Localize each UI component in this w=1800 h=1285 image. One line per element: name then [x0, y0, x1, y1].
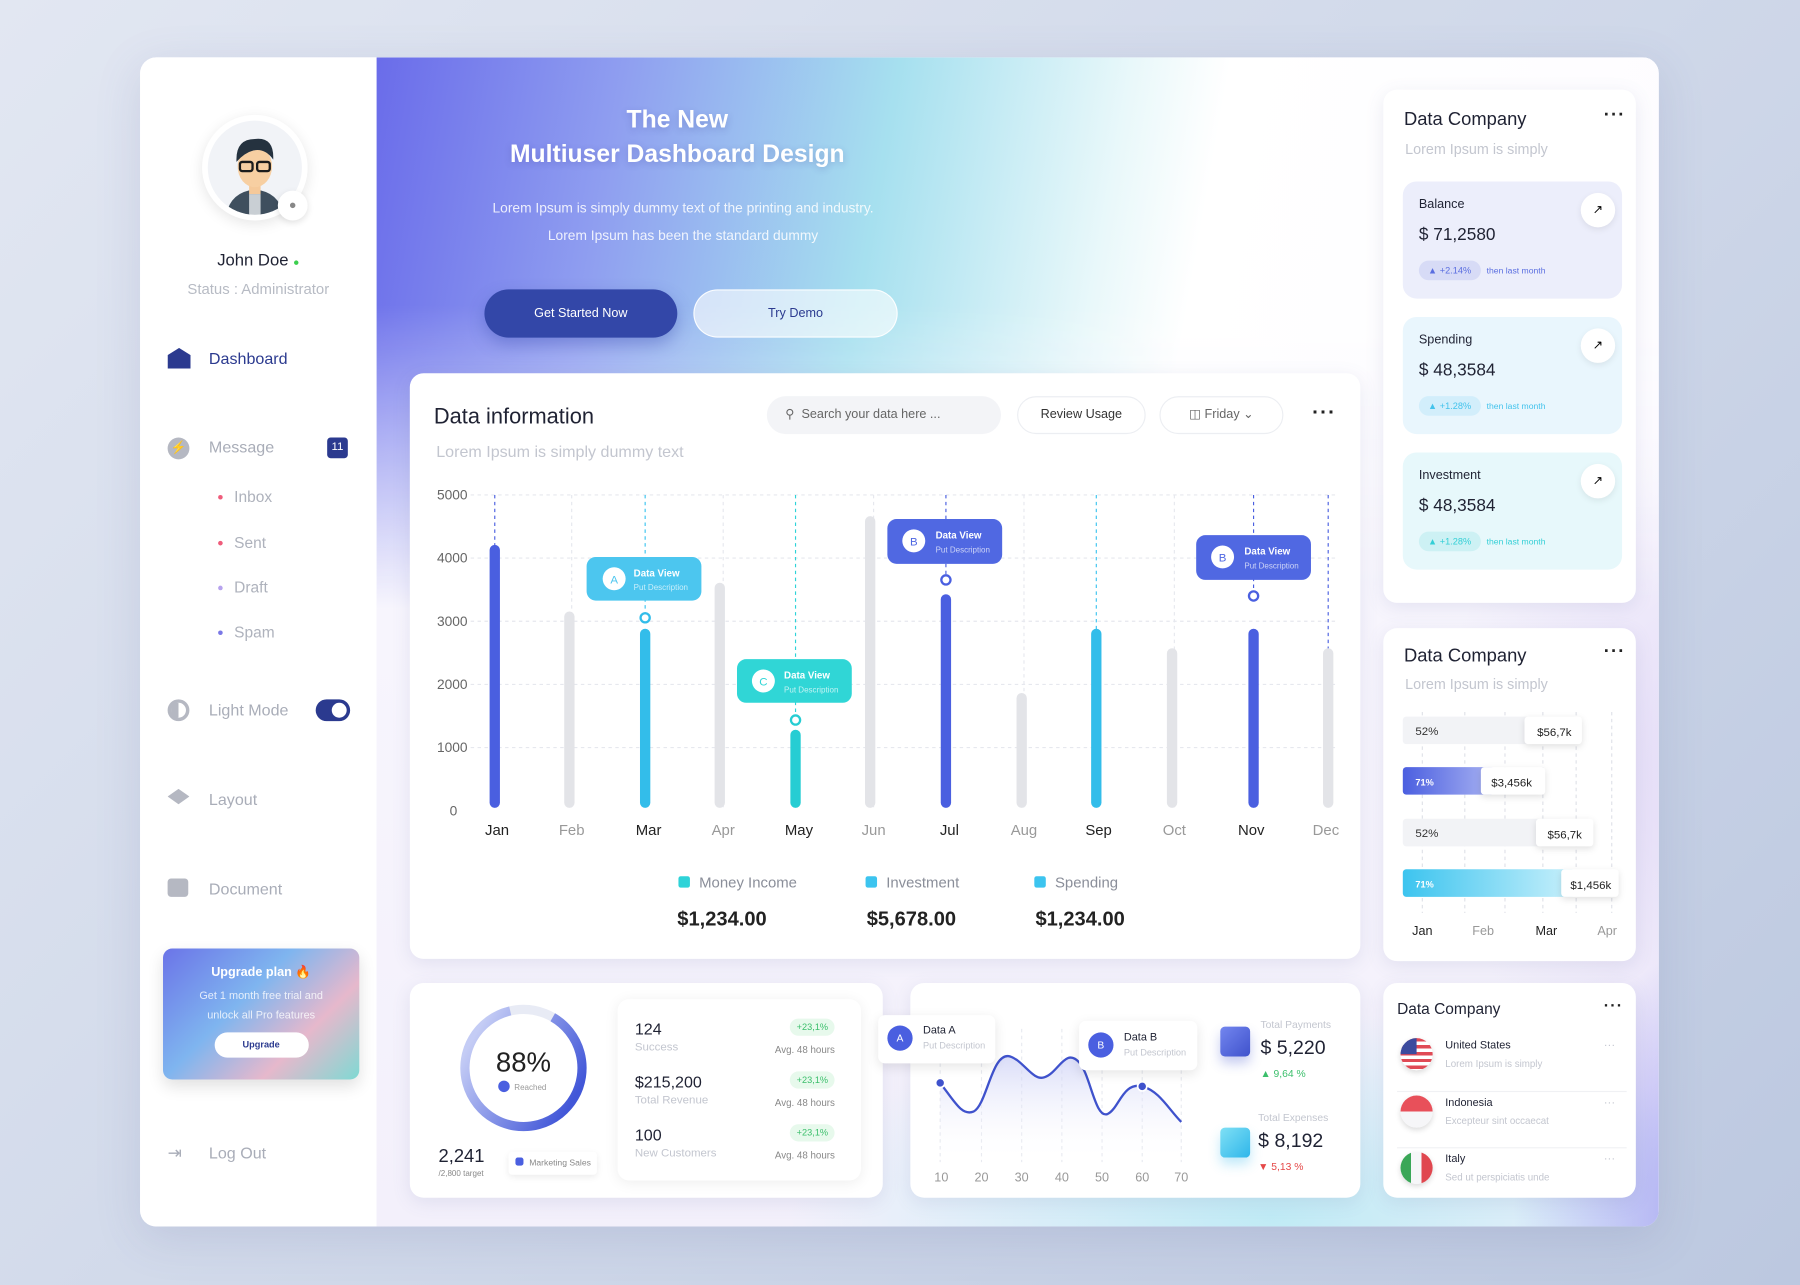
horizontal bar chart: [1402, 712, 1620, 938]
investment card: ▲ +1.28%: [1428, 536, 1471, 547]
balance card: Balance: [1419, 198, 1465, 211]
submenu: Spam: [234, 624, 275, 641]
panel: line chart & totals: Total Expenses: [1258, 1112, 1328, 1123]
line chart: 40: [1055, 1171, 1069, 1185]
stats list: +23,1%: [797, 1022, 828, 1032]
tooltip A: Data View: [634, 568, 680, 579]
country: italy: [1397, 1147, 1627, 1193]
panel: line chart & totals: $ 5,220: [1260, 1037, 1326, 1059]
bar chart: Apr: [712, 822, 735, 839]
total expenses: [1220, 1128, 1250, 1158]
investment card: $ 48,3584: [1419, 496, 1495, 516]
country: united states: United States: [1445, 1039, 1511, 1052]
nav: document: [168, 878, 282, 898]
bar chart: Feb: [559, 822, 585, 839]
tooltip B (Jul): B: [910, 536, 918, 548]
bar chart: 0: [450, 803, 458, 818]
nav: light mode: [168, 699, 350, 722]
horizontal bar chart: 52%: [1415, 726, 1438, 738]
donut chart: 88%: [496, 1046, 551, 1077]
hero title: [510, 106, 846, 170]
hero subtitle: [493, 200, 874, 243]
target count: 2,241: [439, 1147, 484, 1167]
panel: line chart & totals: $ 8,192: [1258, 1130, 1323, 1152]
legend: Investment: [886, 874, 959, 891]
donut chart: [460, 1004, 587, 1132]
spending card: [1403, 317, 1622, 434]
marketing sales chip: [509, 1152, 597, 1175]
horizontal bar chart: $56,7k: [1537, 727, 1572, 739]
balance card: [1403, 181, 1622, 299]
nav: log out: ⇥: [168, 1144, 182, 1163]
stats list: Avg. 48 hours: [775, 1097, 835, 1108]
nav: message: Message: [209, 438, 274, 456]
panel: line chart & totals: ▼ 5,13 %: [1258, 1161, 1303, 1172]
submenu: Draft: [234, 579, 268, 596]
nav: message: [168, 438, 348, 460]
nav: document: Document: [209, 880, 282, 898]
tooltip: data B: Put Description: [1124, 1047, 1186, 1058]
panel: data company balances: Data Company: [1404, 110, 1526, 130]
bar chart: 2000: [437, 677, 468, 692]
user status: Status : Administrator: [187, 280, 329, 297]
investment card: then last month: [1487, 536, 1545, 547]
bar chart: Oct: [1163, 822, 1187, 839]
hero title: The New: [627, 106, 728, 133]
tooltip B (Nov): Data View: [1244, 547, 1291, 558]
horizontal bar chart: 71%: [1415, 880, 1434, 890]
panel: reached stats: [410, 983, 883, 1198]
bar chart: Mar: [636, 822, 661, 839]
stats list: [618, 999, 861, 1181]
button: get started: [484, 289, 677, 338]
line chart: 50: [1095, 1171, 1109, 1185]
panel: data company bars: [1383, 628, 1636, 961]
country: indonesia: [1397, 1091, 1627, 1137]
line chart: 20: [974, 1171, 989, 1185]
bar chart: [437, 488, 1340, 839]
country: italy: ···: [1604, 1153, 1615, 1166]
line chart: 60: [1135, 1171, 1149, 1185]
balance card: ↗: [1593, 203, 1603, 217]
stats list: +23,1%: [797, 1075, 828, 1085]
nav: layout: [168, 789, 258, 808]
donut chart: Reached: [514, 1083, 546, 1092]
line chart: [934, 1029, 1188, 1185]
spending card: $ 48,3584: [1419, 361, 1495, 380]
heading: Data information: [434, 405, 594, 429]
panel: reached stats: /2,800 target: [439, 1170, 484, 1178]
total payments: [1220, 1027, 1250, 1056]
legend: Spending: [1055, 874, 1118, 891]
hero subtitle: Lorem Ipsum is simply dummy text of the printing and industry.: [493, 200, 874, 216]
main dashboard card: [140, 57, 1659, 1226]
line chart: 70: [1174, 1171, 1188, 1185]
balance card: ▲ +2.14%: [1428, 265, 1471, 276]
hero subtitle: Lorem Ipsum has been the standard dummy: [548, 227, 818, 243]
bar chart: 1000: [437, 740, 468, 755]
stats list: Total Revenue: [635, 1094, 708, 1107]
spending card: ▲ +1.28%: [1428, 401, 1471, 411]
tooltip: data B: [1079, 1021, 1197, 1070]
balance card: then last month: [1487, 265, 1545, 276]
tooltip C: Data View: [784, 671, 830, 682]
country: indonesia: Excepteur sint occaecat: [1445, 1115, 1549, 1127]
panel: data company balances: [1383, 90, 1636, 603]
button: try demo: Try Demo: [768, 307, 823, 320]
investment card: [1403, 452, 1622, 570]
tooltip B (Jul): [887, 519, 1002, 564]
review usage button: [1017, 396, 1146, 434]
panel: data company bars: Lorem Ipsum is simply: [1405, 676, 1548, 692]
tooltip A: [587, 557, 701, 601]
nav: message: ⚡: [171, 441, 186, 455]
panel: data company bars: ···: [1604, 642, 1625, 661]
tooltip: data A: Put Description: [923, 1040, 985, 1051]
country: italy: Sed ut perspiciatis unde: [1445, 1171, 1549, 1183]
horizontal bar chart: $3,456k: [1491, 778, 1532, 790]
tooltip B (Jul): Put Description: [936, 545, 990, 554]
horizontal bar chart: 52%: [1415, 828, 1438, 840]
upgrade plan card: [163, 949, 359, 1079]
tooltip A: A: [610, 574, 618, 586]
upgrade plan card: Upgrade plan 🔥: [211, 966, 311, 980]
nav: dashboard: [168, 348, 288, 368]
country: united states: Lorem Ipsum is simply: [1445, 1058, 1542, 1069]
sidebar: [140, 57, 377, 1226]
tooltip: data B: B: [1097, 1039, 1104, 1051]
upgrade plan card: unlock all Pro features: [207, 1009, 315, 1022]
review usage button: Review Usage: [1041, 408, 1122, 421]
horizontal bar chart: $1,456k: [1570, 880, 1611, 892]
balance card: $ 71,2580: [1419, 225, 1495, 245]
legend: [677, 874, 1125, 930]
tooltip: data B: Data B: [1124, 1031, 1157, 1044]
bar chart: Jun: [862, 822, 886, 839]
tooltip C: C: [759, 677, 768, 689]
panel: data information: [410, 373, 1360, 959]
bar chart: May: [785, 822, 814, 839]
tooltip C: Put Description: [784, 685, 838, 694]
bar chart: Nov: [1238, 822, 1265, 839]
horizontal bar chart: 71%: [1415, 777, 1434, 787]
tooltip: data A: A: [897, 1032, 903, 1044]
bar chart: Aug: [1011, 822, 1037, 839]
country: indonesia: ···: [1604, 1097, 1615, 1109]
stats list: 100: [635, 1125, 662, 1144]
stats list: Success: [635, 1042, 678, 1054]
hero title: Multiuser Dashboard Design: [510, 140, 845, 168]
horizontal bar chart: Apr: [1597, 924, 1617, 938]
panel: line chart & totals: Total Payments: [1260, 1019, 1331, 1030]
line chart: 10: [934, 1171, 948, 1185]
legend: $5,678.00: [867, 907, 956, 930]
bar chart: 5000: [437, 488, 468, 503]
subtitle: Lorem Ipsum is simply dummy text: [436, 442, 684, 460]
panel: line chart & totals: ▲ 9,64 %: [1260, 1068, 1306, 1079]
horizontal bar chart: Mar: [1535, 924, 1557, 938]
bar chart: Jul: [940, 822, 959, 839]
tooltip B (Nov): [1196, 535, 1311, 580]
bar chart: 3000: [437, 614, 468, 629]
nav: light mode: Light Mode: [209, 700, 288, 719]
bar chart: 4000: [437, 551, 468, 566]
button: try demo: [693, 289, 898, 338]
avatar: [202, 115, 308, 220]
bar chart: Sep: [1085, 822, 1112, 839]
button: get started: Get Started Now: [534, 307, 628, 320]
menu dots: ···: [1312, 401, 1336, 424]
nav: layout: Layout: [209, 790, 257, 808]
panel: data company countries: Data Company: [1397, 1000, 1500, 1017]
nav: log out: [168, 1144, 266, 1163]
friday dropdown: ◫ Friday ⌄: [1189, 408, 1254, 421]
spending card: Spending: [1419, 333, 1472, 347]
tooltip: data A: [878, 1015, 995, 1063]
country: united states: [1398, 1038, 1615, 1074]
upgrade plan card: Get 1 month free trial and: [199, 990, 323, 1003]
avatar badge: ●: [289, 199, 297, 212]
stats list: Avg. 48 hours: [775, 1044, 835, 1055]
tooltip B (Nov): Put Description: [1244, 561, 1299, 570]
stats list: 124: [635, 1020, 662, 1038]
horizontal bar chart: Feb: [1472, 924, 1494, 938]
panel: data company countries: [1383, 983, 1636, 1198]
stats list: $215,200: [635, 1073, 702, 1091]
stats list: +23,1%: [797, 1128, 828, 1138]
legend: $1,234.00: [1035, 907, 1125, 930]
panel: line chart & totals: [910, 983, 1360, 1198]
submenu: Sent: [234, 534, 266, 551]
country: united states: ···: [1604, 1039, 1615, 1052]
nav: dashboard: Dashboard: [209, 349, 288, 367]
panel: data company bars: Data Company: [1404, 647, 1526, 666]
line chart: 30: [1015, 1171, 1029, 1185]
tooltip A: Put Description: [634, 583, 688, 592]
panel: data company balances: ···: [1604, 106, 1625, 125]
upgrade plan card: Upgrade: [243, 1039, 280, 1050]
panel: data company countries: ···: [1604, 996, 1623, 1014]
marketing sales chip: Marketing Sales: [529, 1158, 591, 1168]
legend: Money Income: [699, 874, 797, 891]
tooltip B (Nov): B: [1219, 553, 1227, 565]
submenu: [218, 488, 275, 641]
search box: ⚲ Search your data here ...: [785, 408, 940, 421]
horizontal bar chart: Jan: [1412, 924, 1432, 938]
avatar badge: [278, 191, 308, 220]
investment card: Investment: [1419, 469, 1481, 482]
nav: log out: Log Out: [209, 1144, 266, 1162]
tooltip: data A: Data A: [923, 1024, 956, 1037]
bar chart: Jan: [485, 822, 509, 839]
submenu: Inbox: [234, 488, 272, 505]
tooltip B (Jul): Data View: [936, 531, 982, 542]
friday dropdown: [1159, 396, 1283, 434]
user name: John Doe ●: [217, 251, 299, 270]
bar chart: Dec: [1313, 822, 1340, 839]
country: indonesia: Indonesia: [1445, 1097, 1493, 1109]
spending card: ↗: [1593, 339, 1603, 353]
country: italy: Italy: [1445, 1153, 1465, 1166]
panel: data company balances: Lorem Ipsum is simply: [1405, 141, 1548, 157]
spending card: then last month: [1487, 401, 1545, 411]
legend: $1,234.00: [677, 907, 767, 930]
stats list: New Customers: [635, 1147, 716, 1160]
search box: [767, 396, 1001, 434]
nav: message: 11: [332, 441, 343, 454]
tooltip C: [737, 659, 852, 703]
investment card: ↗: [1593, 474, 1603, 488]
horizontal bar chart: $56,7k: [1547, 829, 1582, 841]
stats list: Avg. 48 hours: [775, 1149, 835, 1161]
